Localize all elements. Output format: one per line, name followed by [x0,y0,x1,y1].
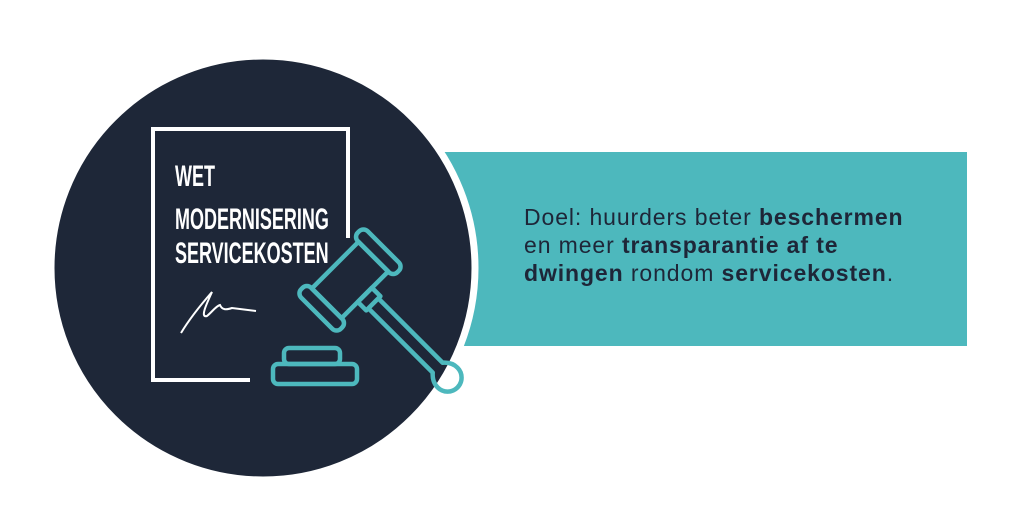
icon: gavel [273,227,491,421]
document title: MODERNISERING [175,204,329,236]
goal text: Doel: huurders beter beschermen [524,204,903,230]
goal text: en meer transparantie af te [524,232,838,258]
teal panel [440,152,967,346]
document frame [153,129,348,380]
dark circle [51,56,475,480]
signature [181,292,256,333]
document title [175,161,329,270]
document title: SERVICEKOSTEN [175,238,329,270]
document title: WET [175,161,215,193]
goal text [524,204,903,286]
goal text: dwingen rondom servicekosten. [524,260,894,286]
